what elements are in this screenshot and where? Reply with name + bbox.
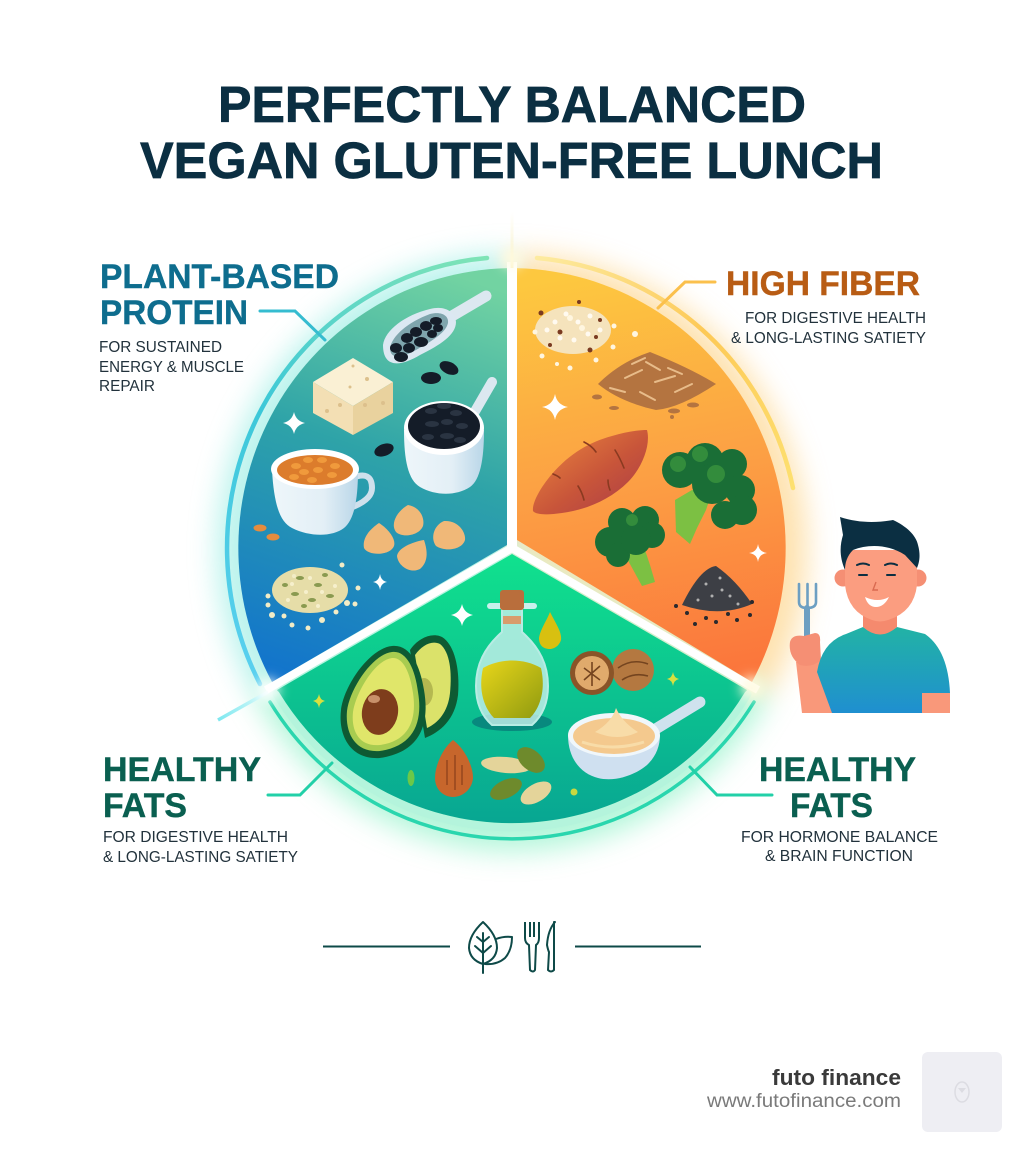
icon: sparkles on protein: [283, 412, 387, 590]
white spokes: [266, 262, 758, 690]
leader line: protein: [260, 311, 325, 340]
neck: [863, 605, 897, 634]
light flares at spoke ends: [218, 212, 763, 720]
footer brand: futo finance: [772, 1065, 901, 1090]
icon: oil drop: [539, 612, 561, 649]
segment: fats: [277, 554, 747, 823]
eyes and mouth: [857, 564, 897, 575]
label: healthy fats left: FATS: [103, 787, 187, 825]
icon: hemp seed pile: [266, 562, 360, 630]
label: high fiber: HIGH FIBER: [726, 265, 920, 303]
title: [140, 76, 883, 189]
label: healthy fats right: [741, 751, 938, 865]
segment: protein: [238, 268, 507, 682]
icon: quinoa pile: [532, 300, 638, 370]
icon: almond: [435, 740, 473, 797]
label: healthy fats left: [103, 751, 298, 866]
leader line: fats left: [268, 763, 332, 795]
icon: cup of black beans: [404, 382, 492, 494]
icon: cup of lentils: [271, 449, 372, 535]
icon: person with fork: [790, 517, 950, 713]
icon: back avocado half: [410, 635, 458, 738]
plate: three segment pie: [238, 268, 786, 823]
label: plant-based protein: PROTEIN: [100, 294, 248, 332]
label: plant-based protein: [99, 258, 339, 395]
label: healthy fats right: & BRAIN FUNCTION: [765, 848, 913, 865]
outer arc: fiber: [537, 258, 793, 488]
icon: sparkle on fiber: [542, 394, 568, 420]
icon: fork: [525, 922, 539, 972]
icon: chickpeas: [364, 505, 465, 571]
label: healthy fats left: & LONG-LASTING SATIETY: [103, 849, 298, 866]
label: plant-based protein: ENERGY & MUSCLE: [99, 359, 244, 376]
icon: hummus bowl: [568, 702, 700, 779]
icon: leaves: [469, 922, 512, 973]
title: PERFECTLY BALANCED: [218, 76, 806, 133]
icon: brown rice pile: [592, 352, 716, 419]
outer arc: protein: [227, 258, 487, 684]
hair: [840, 517, 920, 570]
icon: sparkles on fats: [313, 604, 679, 796]
title: VEGAN GLUTEN-FREE LUNCH: [140, 132, 883, 189]
icon: large broccoli: [662, 443, 757, 544]
label: healthy fats left: FOR DIGESTIVE HEALTH: [103, 829, 288, 846]
icon: front avocado half: [341, 646, 426, 758]
icon: loose black beans: [373, 358, 461, 459]
label: plant-based protein: PLANT-BASED: [100, 258, 339, 296]
footer brand: [706, 1065, 901, 1112]
icon: bean scoop: [383, 296, 486, 363]
logo placeholder: [922, 1052, 1002, 1132]
footer brand: www.futofinance.com: [706, 1091, 901, 1112]
outer arc: fats: [270, 694, 754, 839]
icon: sweet potato: [533, 430, 648, 514]
divider with leaf and cutlery icons: [323, 922, 701, 973]
label: healthy fats right: HEALTHY: [759, 751, 916, 789]
leader line: fats right: [690, 767, 772, 795]
icon: small broccoli: [595, 506, 665, 586]
icon: pumpkin seeds: [480, 742, 555, 809]
glow behind plate: [217, 254, 807, 851]
icon: olive oil bottle: [472, 590, 552, 731]
arms: [922, 693, 950, 713]
label: healthy fats right: FOR HORMONE BALANCE: [741, 829, 938, 846]
icon: walnuts: [570, 649, 654, 695]
label: plant-based protein: REPAIR: [99, 378, 155, 395]
label: high fiber: [726, 265, 926, 347]
icon: tofu cube: [313, 358, 393, 435]
shirt: [817, 627, 950, 713]
label: high fiber: & LONG-LASTING SATIETY: [731, 330, 926, 347]
label: high fiber: FOR DIGESTIVE HEALTH: [745, 310, 926, 327]
fork: [799, 584, 816, 680]
icon: sparkle on chia: [749, 544, 767, 562]
label: healthy fats right: FATS: [790, 787, 873, 825]
icon: loose lentils: [254, 524, 280, 540]
label: healthy fats left: HEALTHY: [103, 751, 261, 789]
ears: [834, 570, 852, 586]
icon: knife: [547, 922, 555, 972]
icon: chia pile: [674, 566, 754, 626]
leader line: fiber: [658, 282, 715, 308]
hand: [790, 633, 821, 666]
segment: fiber: [517, 268, 786, 682]
face: [845, 550, 917, 622]
label: plant-based protein: FOR SUSTAINED: [99, 339, 222, 356]
